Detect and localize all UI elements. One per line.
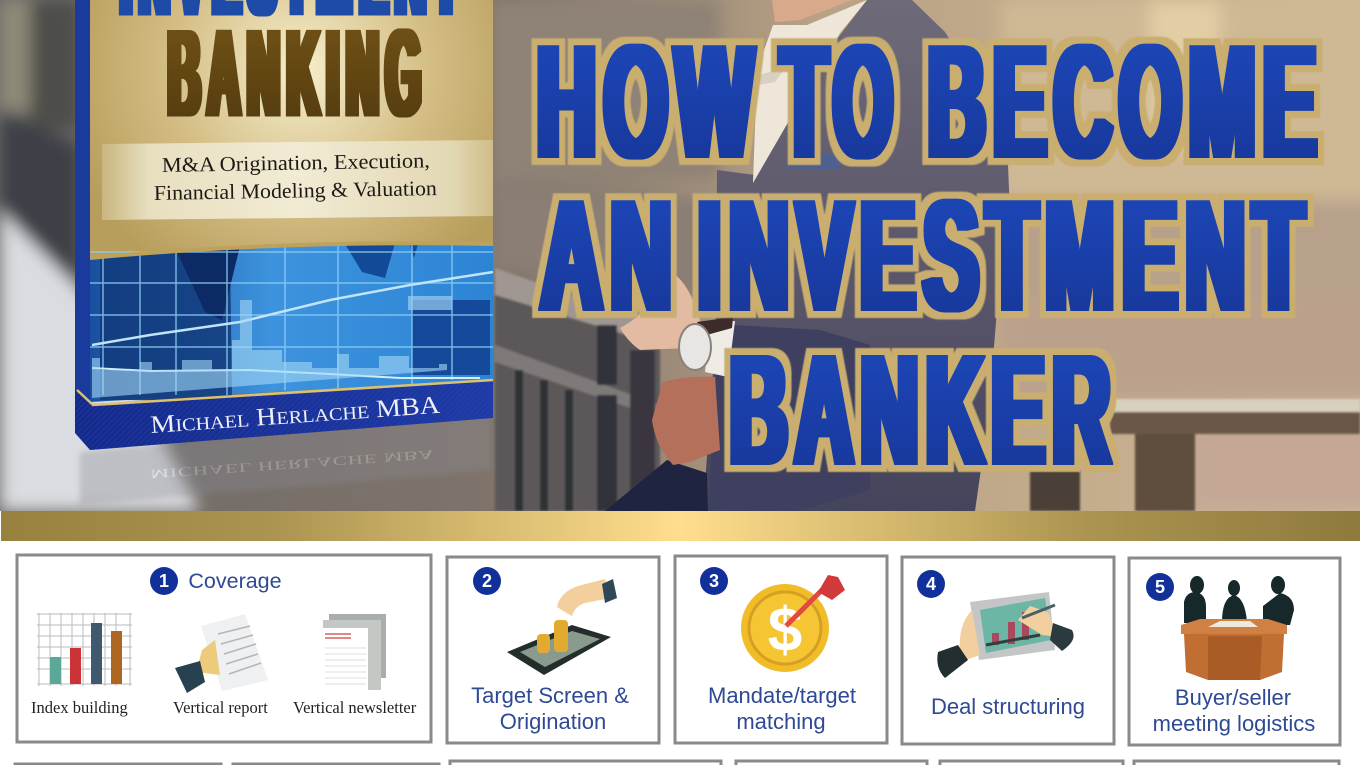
neck xyxy=(772,0,852,22)
label: mandate/target matching: matching xyxy=(736,709,826,734)
icon: silhouettes and table xyxy=(1181,576,1294,680)
lower hand xyxy=(652,377,720,465)
book author: Michael Herlache MBA xyxy=(150,392,441,439)
background photo xyxy=(0,0,1360,511)
label: target screen and origination: Target Screen & xyxy=(471,683,629,708)
subtitle band xyxy=(102,140,493,220)
heading: coverage: Coverage xyxy=(188,569,282,593)
step number 3 xyxy=(700,567,728,595)
step number 5: 5 xyxy=(1155,577,1165,597)
book reflection xyxy=(80,410,492,505)
tie knot xyxy=(760,72,782,84)
sleeve xyxy=(710,325,870,480)
step number 2: 2 xyxy=(482,571,492,591)
icon: newsletter xyxy=(323,614,386,692)
watch xyxy=(679,317,735,377)
book title xyxy=(120,0,466,143)
upper hand xyxy=(620,273,700,350)
book spine xyxy=(75,0,91,450)
label: vertical report: Vertical report xyxy=(173,698,268,717)
panel: buyer/seller meeting logistics xyxy=(1129,558,1340,745)
label: target screen and origination xyxy=(471,683,629,734)
panel: coverage xyxy=(17,555,431,742)
shirt xyxy=(753,0,867,183)
label: deal structuring: Deal structuring xyxy=(931,694,1085,719)
icon: dollar coin and dart: $ xyxy=(768,596,802,665)
blue chart area xyxy=(90,243,493,402)
step number 4: 4 xyxy=(926,574,936,594)
icon: tablet and coins xyxy=(507,579,617,675)
label: vertical newsletter: Vertical newsletter xyxy=(293,698,417,717)
step number 5 xyxy=(1146,573,1174,601)
gold divider bar xyxy=(1,511,1360,541)
navy band xyxy=(75,380,493,450)
lower front dark xyxy=(605,460,708,511)
title: how to become an investment banker xyxy=(537,12,1324,498)
icon: tablet and hands xyxy=(937,592,1074,678)
label: mandate/target matching xyxy=(708,683,856,734)
label: mandate/target matching: Mandate/target xyxy=(708,683,856,708)
book reflection: MICHAEL HERLACHE MBA xyxy=(150,447,435,481)
text: BANKING xyxy=(168,5,428,143)
step number 1 xyxy=(150,567,178,595)
panel row 2: cut-off cards xyxy=(15,761,1339,765)
book: Investment Banking: Financial Modeling & Valuation xyxy=(154,176,438,205)
gold cover xyxy=(90,0,493,257)
icon: bar chart xyxy=(37,613,132,686)
title: how to become an investment banker: AN xyxy=(541,168,680,344)
panel: deal structuring xyxy=(902,557,1114,744)
step number 2 xyxy=(473,567,501,595)
gold curve xyxy=(90,243,493,258)
pocket square xyxy=(785,153,840,170)
businessman photo xyxy=(605,0,1010,511)
title: how to become an investment banker: TO xyxy=(781,12,900,192)
panel: target screen and origination xyxy=(447,557,659,743)
icon: report in hand xyxy=(175,614,268,693)
step number 1: 1 xyxy=(159,571,169,591)
jacket xyxy=(706,0,1010,511)
title: how to become an investment banker: HOW xyxy=(537,12,761,192)
label: index building: Index building xyxy=(31,698,128,717)
book: Investment Banking xyxy=(75,0,493,505)
label: buyer/seller meeting logistics xyxy=(1153,685,1315,736)
panel: mandate/target matching xyxy=(675,556,887,743)
icon: dollar coin and dart xyxy=(741,575,845,672)
step number 3: 3 xyxy=(709,571,719,591)
label: buyer/seller meeting logistics: Buyer/seller xyxy=(1175,685,1291,710)
label: target screen and origination: Origination xyxy=(500,709,606,734)
step number 4 xyxy=(917,570,945,598)
label: buyer/seller meeting logistics: meeting logistics xyxy=(1153,711,1315,736)
book subtitle: M&A Origination, Execution, xyxy=(162,148,430,177)
